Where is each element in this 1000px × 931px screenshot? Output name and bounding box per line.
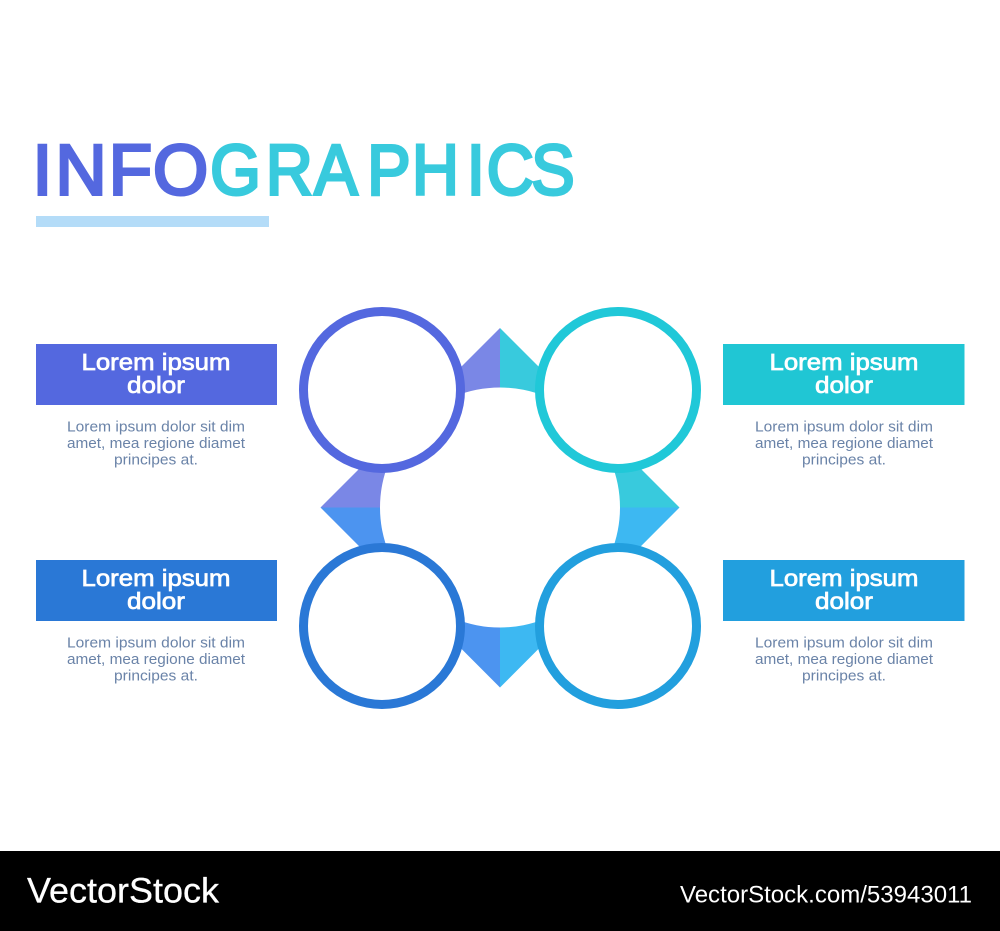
footer bar <box>0 851 1000 931</box>
body text: principes at. <box>802 452 886 468</box>
panel: top right <box>723 344 964 468</box>
central ring diagram <box>304 312 696 704</box>
body text <box>755 634 934 684</box>
heading bar <box>36 560 277 621</box>
body text: principes at. <box>114 668 198 684</box>
body text: Lorem ipsum dolor sit dim <box>67 634 245 652</box>
circle: bottom left <box>304 548 460 704</box>
ring segment: top left <box>320 328 500 508</box>
body text: Lorem ipsum dolor sit dim <box>755 418 933 436</box>
heading bar <box>723 344 964 405</box>
circle: top right <box>540 312 696 468</box>
footer brand: VectorStock <box>27 872 220 911</box>
panel: bottom left <box>36 560 277 684</box>
title: INFO <box>32 131 208 210</box>
heading bar: dolor <box>127 372 185 398</box>
circle: bottom right <box>540 548 696 704</box>
panel: top left <box>36 344 277 468</box>
heading bar <box>723 560 964 621</box>
heading bar <box>36 344 277 405</box>
body text: amet, mea regione diamet <box>755 435 934 452</box>
body text: amet, mea regione diamet <box>67 435 246 452</box>
heading bar: Lorem ipsum <box>770 565 918 591</box>
footer url: VectorStock.com/53943011 <box>680 881 972 908</box>
circle: top left <box>304 312 460 468</box>
heading bar: dolor <box>815 588 873 614</box>
body text <box>67 634 246 684</box>
body text: principes at. <box>802 668 886 684</box>
body text <box>67 418 246 468</box>
heading bar: Lorem ipsum <box>82 565 230 591</box>
ring segment: bottom left <box>320 508 500 688</box>
title <box>32 131 575 210</box>
title: GRAPHICS <box>210 131 575 210</box>
body text: Lorem ipsum dolor sit dim <box>67 418 245 436</box>
heading bar: dolor <box>127 588 185 614</box>
body text: principes at. <box>114 452 198 468</box>
body text: Lorem ipsum dolor sit dim <box>755 634 933 652</box>
heading bar: dolor <box>815 372 873 398</box>
heading bar: Lorem ipsum <box>82 349 230 375</box>
ring segment: bottom right <box>500 508 680 688</box>
body text: amet, mea regione diamet <box>755 651 934 668</box>
ring segment: top right <box>500 328 680 508</box>
title underline <box>36 216 269 227</box>
body text <box>755 418 934 468</box>
body text: amet, mea regione diamet <box>67 651 246 668</box>
heading bar: Lorem ipsum <box>770 349 918 375</box>
panel: bottom right <box>723 560 964 684</box>
